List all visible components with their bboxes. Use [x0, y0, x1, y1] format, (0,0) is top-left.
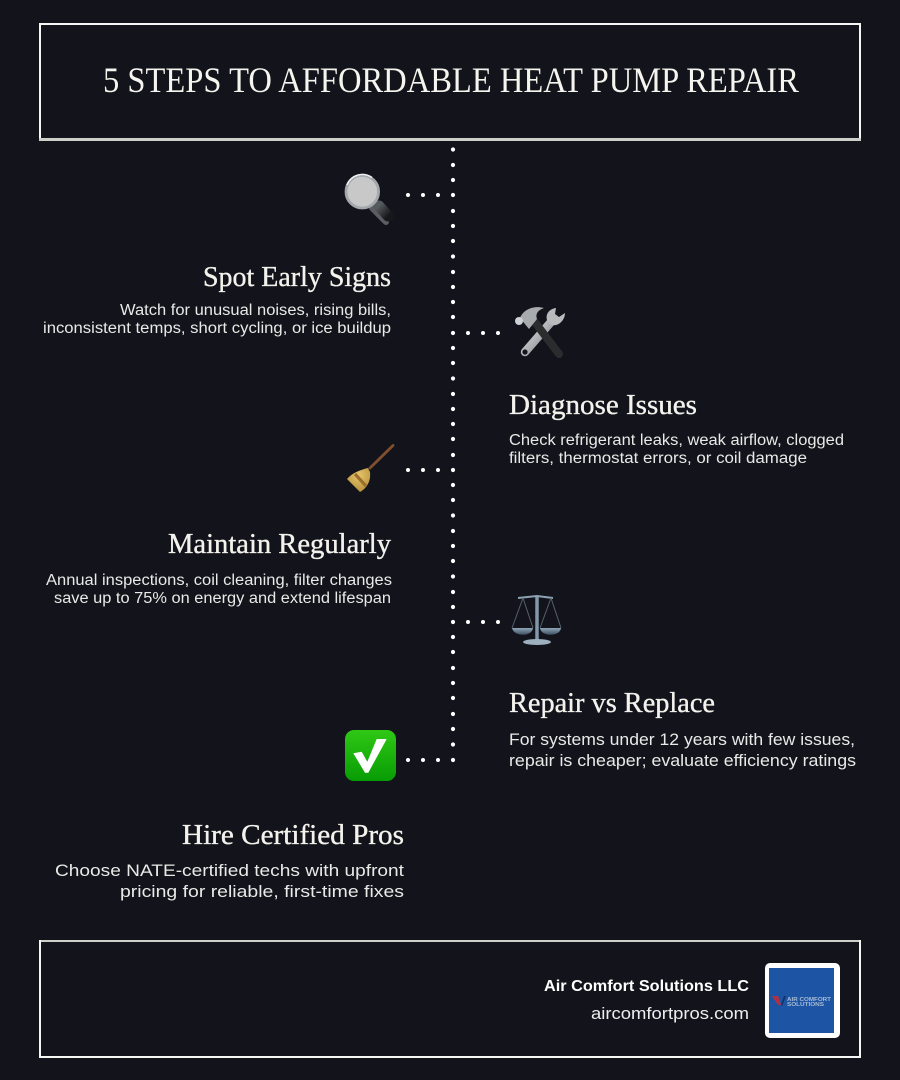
text: hire certified pros: Choose NATE-certified techs with upfront	[55, 862, 404, 880]
step 4: repair vs replace	[466, 596, 856, 770]
text: repair vs replace: For systems under 12 years with few issues,	[509, 731, 855, 749]
text: repair vs replace: repair is cheaper; evaluate efficiency ratings	[509, 752, 856, 770]
connector dots 4	[466, 620, 500, 624]
footer panel	[40, 940, 860, 1057]
website: aircomfortpros.com	[591, 1005, 749, 1023]
icon: green check mark	[345, 730, 396, 781]
step 3: maintain regularly	[46, 446, 440, 607]
text: spot early signs	[43, 302, 391, 337]
text: hire certified pros: pricing for reliable, first-time fixes	[120, 883, 404, 901]
title: 5 STEPS TO AFFORDABLE HEAT PUMP REPAIR	[103, 60, 799, 100]
logo: AIR COMFORT	[787, 997, 831, 1003]
text: diagnose issues	[509, 432, 844, 467]
connector dots 3	[406, 468, 440, 472]
connector dots 1	[406, 193, 440, 197]
logo	[765, 963, 840, 1038]
connector dots 5	[406, 758, 440, 762]
heading: maintain regularly: Maintain Regularly	[168, 529, 391, 560]
dotted timeline	[451, 147, 455, 762]
text: repair vs replace	[509, 731, 856, 770]
step 2: diagnose issues	[466, 307, 844, 467]
icon: broom	[347, 446, 393, 492]
text: diagnose issues: filters, thermostat errors, or coil damage	[509, 450, 807, 467]
icon: magnifying glass	[346, 174, 388, 222]
icon: hammer and wrench	[515, 307, 565, 355]
text: maintain regularly	[46, 572, 392, 607]
text: spot early signs: Watch for unusual noises, rising bills,	[120, 302, 391, 319]
icon: balance scale	[512, 596, 561, 645]
text: maintain regularly: Annual inspections, coil cleaning, filter changes	[46, 572, 392, 589]
text: spot early signs: inconsistent temps, short cycling, or ice buildup	[43, 320, 391, 337]
heading: repair vs replace: Repair vs Replace	[509, 688, 715, 719]
heading: spot early signs: Spot Early Signs	[203, 262, 391, 293]
heading: diagnose issues: Diagnose Issues	[509, 390, 697, 421]
heading: hire certified pros: Hire Certified Pros	[182, 820, 404, 851]
step 1: spot early signs	[43, 174, 440, 337]
text: maintain regularly: save up to 75% on energy and extend lifespan	[54, 590, 391, 607]
text: hire certified pros	[55, 862, 404, 901]
step 5: hire certified pros	[55, 730, 440, 901]
logo: SOLUTIONS	[787, 1002, 825, 1008]
company name: Air Comfort Solutions LLC	[544, 978, 749, 995]
text: diagnose issues: Check refrigerant leaks, weak airflow, clogged	[509, 432, 844, 449]
title panel	[39, 24, 861, 141]
connector dots 2	[466, 331, 500, 335]
